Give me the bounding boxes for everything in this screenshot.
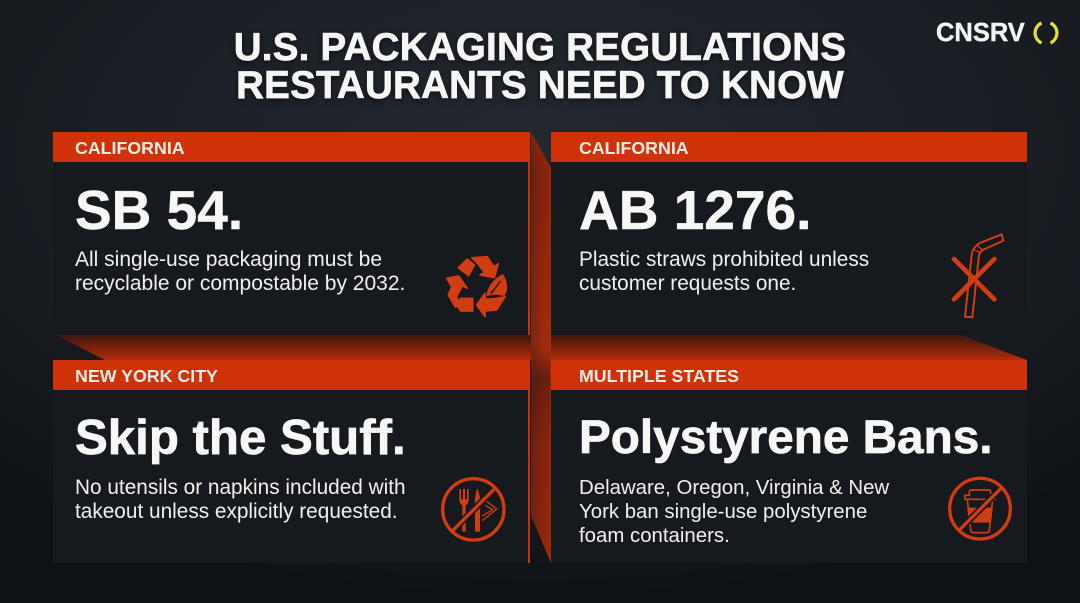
panel: Skip the Stuff xyxy=(53,360,530,563)
description: York ban single-use polystyrene xyxy=(579,501,867,523)
panel: AB 1276 xyxy=(551,132,1027,335)
region label xyxy=(551,360,1027,390)
region label: NEW YORK CITY xyxy=(75,366,218,386)
heading: AB 1276. xyxy=(579,179,811,241)
description xyxy=(75,476,406,523)
description: Plastic straws prohibited unless xyxy=(579,248,869,271)
title: RESTAURANTS NEED TO KNOW xyxy=(236,64,844,106)
icon: no foam cup xyxy=(948,476,1012,541)
title xyxy=(234,26,846,106)
description xyxy=(579,248,869,295)
description xyxy=(579,477,890,547)
icon: recycling with leaf xyxy=(446,256,508,318)
description: Delaware, Oregon, Virginia & New xyxy=(579,477,889,499)
description: recyclable or compostable by 2032. xyxy=(75,272,405,295)
heading: Polystyrene Bans. xyxy=(579,411,992,464)
description xyxy=(75,248,405,295)
region label xyxy=(53,360,530,390)
description: No utensils or napkins included with xyxy=(75,476,406,499)
icon: no utensils xyxy=(441,477,506,542)
region label: CALIFORNIA xyxy=(579,138,689,158)
region label: CALIFORNIA xyxy=(75,138,185,158)
region label xyxy=(53,132,530,162)
icon: crossed-out straw xyxy=(952,233,1004,318)
title: U.S. PACKAGING REGULATIONS xyxy=(234,26,846,68)
logo: CNSRV xyxy=(936,19,1025,47)
panel: SB 54 xyxy=(53,132,530,335)
panel: Polystyrene Bans xyxy=(551,360,1027,563)
description: takeout unless explicitly requested. xyxy=(75,500,398,523)
description: customer requests one. xyxy=(579,272,796,295)
heading: SB 54. xyxy=(75,179,243,241)
heading: Skip the Stuff. xyxy=(75,410,406,465)
region label: MULTIPLE STATES xyxy=(579,366,739,386)
description: All single-use packaging must be xyxy=(75,248,382,271)
region label xyxy=(551,132,1027,162)
description: foam containers. xyxy=(579,525,730,547)
